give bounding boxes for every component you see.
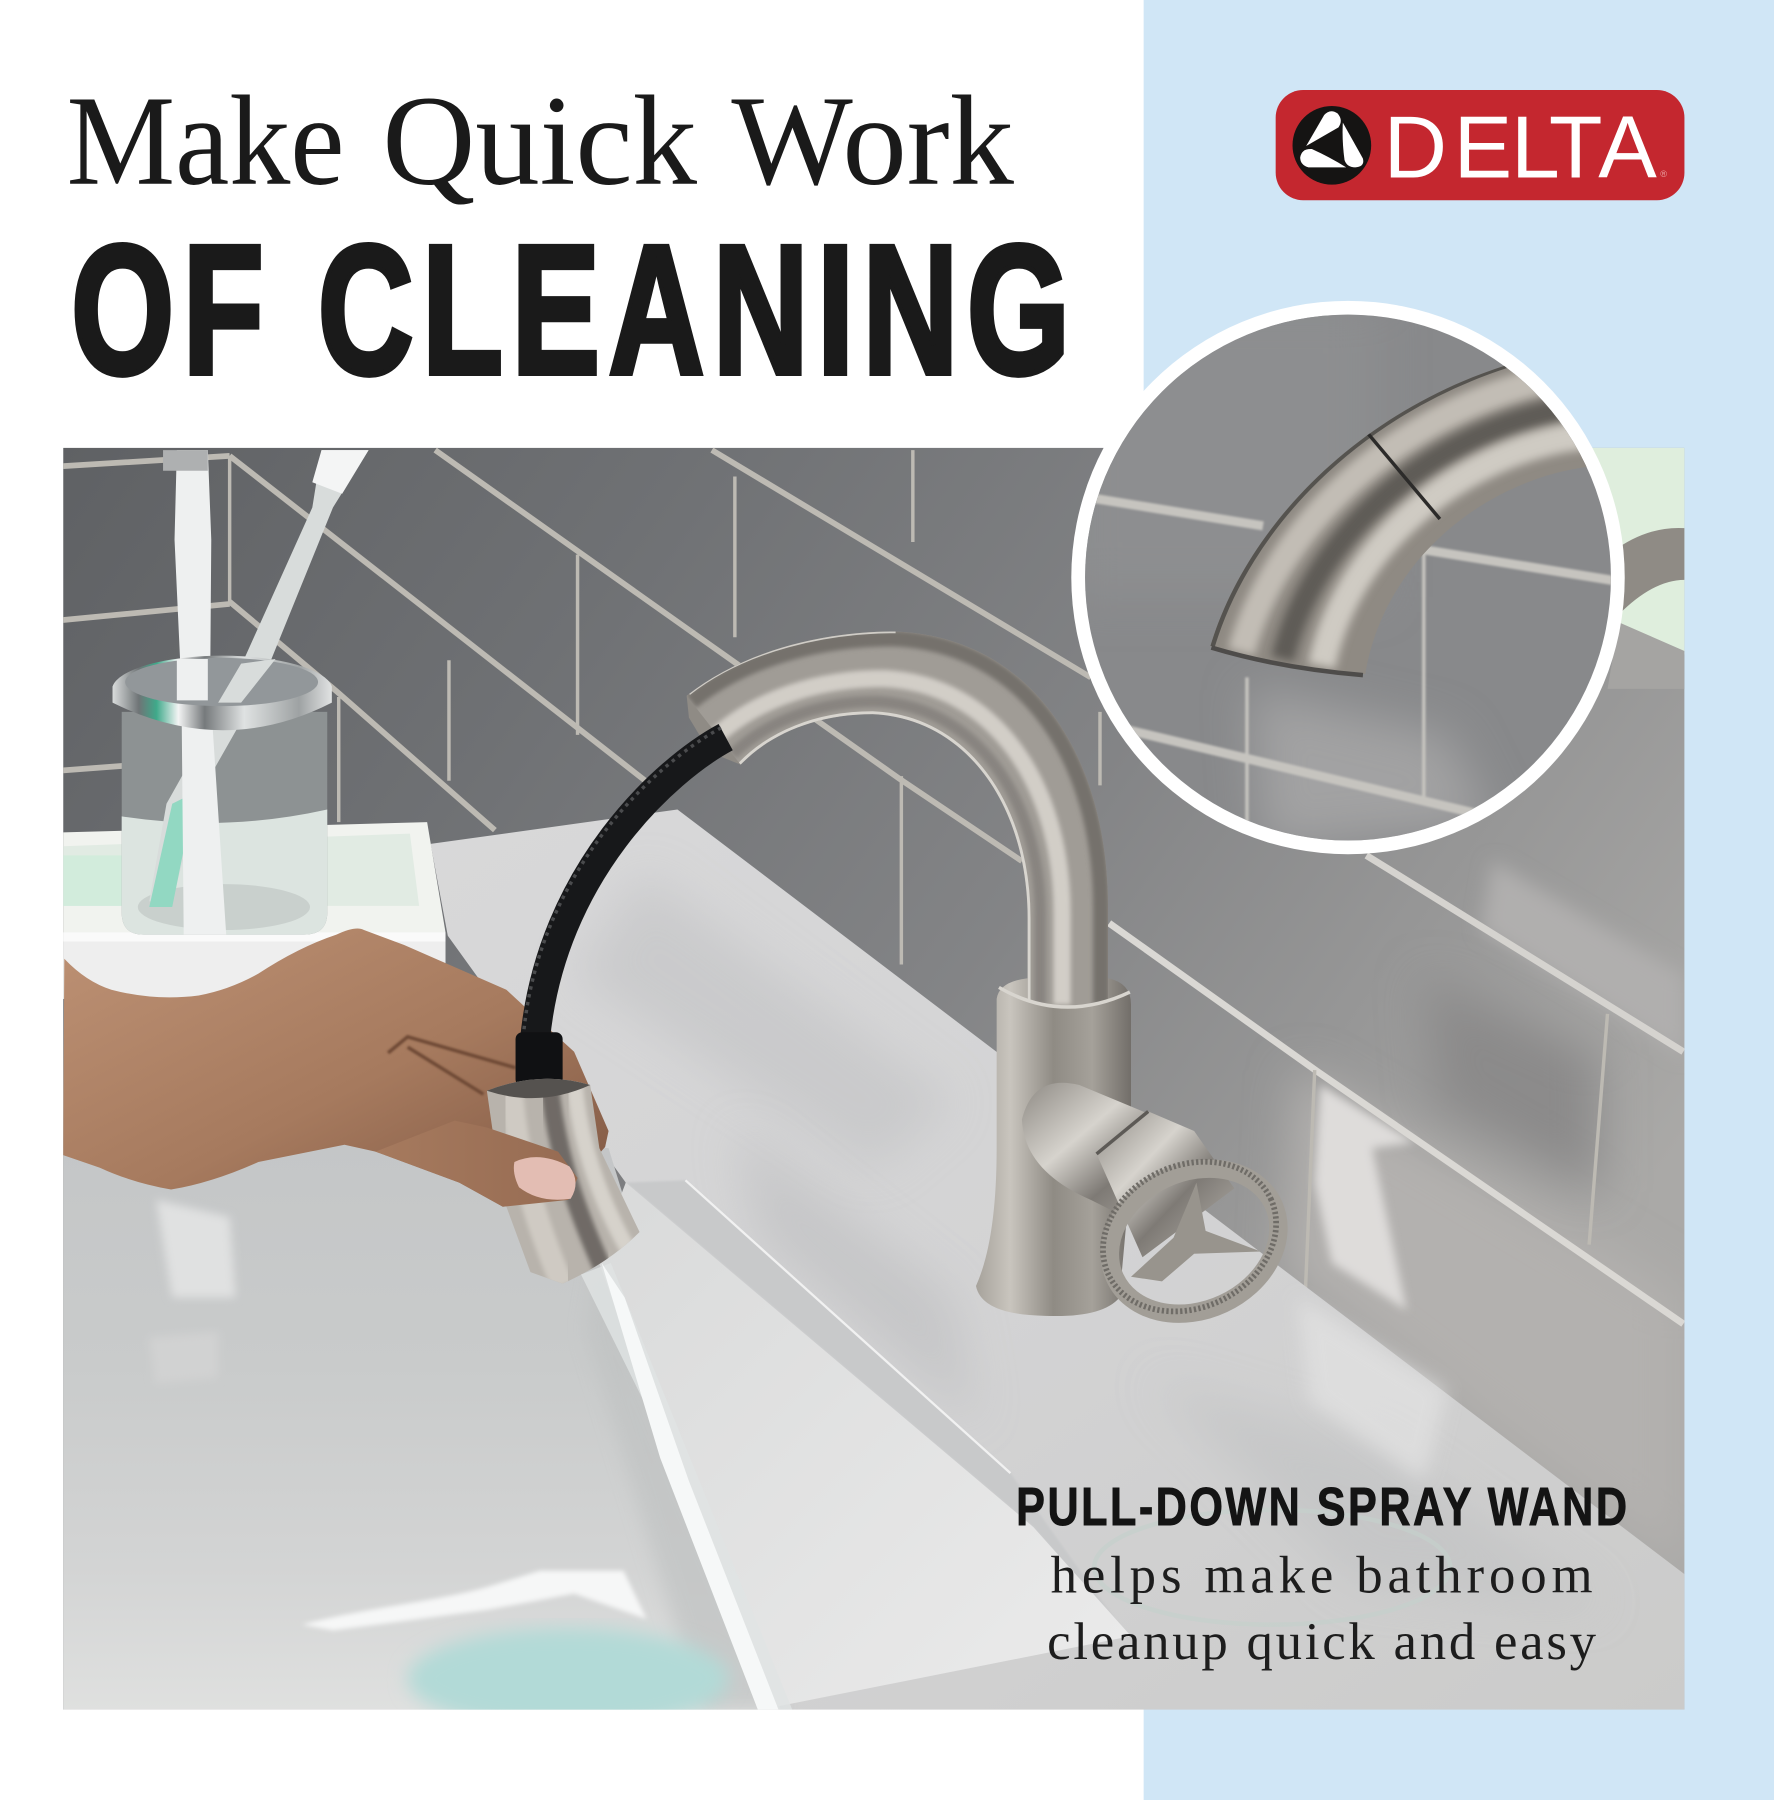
white sink side panel [597, 1183, 1131, 1710]
spray wand [482, 1068, 649, 1292]
sink basin [63, 1137, 1131, 1729]
caption heading: PULL-DOWN SPRAY WAND [1016, 1477, 1627, 1537]
caption line 1: helps make bathroom [1051, 1547, 1593, 1605]
wordmark: DELTA [1384, 97, 1657, 196]
mint tray corner and right faucet glimpse [1590, 448, 1684, 689]
title line 1 word: Quick: Quick [382, 69, 698, 212]
icon: delta triangle mark [1293, 106, 1371, 185]
photo: bathroom faucet scene [63, 448, 1684, 1729]
inset circle: spout close-up [1068, 299, 1653, 861]
marble lip [628, 1181, 1080, 1576]
spout of main faucet [686, 632, 1108, 1006]
cup rim [113, 656, 332, 730]
inset spout [1194, 321, 1653, 689]
faucet body [976, 978, 1131, 1316]
teal water [408, 1628, 729, 1729]
Delta logo [1276, 90, 1684, 200]
title line 1 word: Make: Make [67, 69, 344, 212]
wheel ring [1101, 1160, 1288, 1323]
caption [1016, 1477, 1627, 1671]
caption line 2: cleanup quick and easy [1047, 1613, 1597, 1671]
glass cup [122, 712, 327, 935]
title [67, 69, 1070, 412]
registered mark: ® [1660, 169, 1667, 179]
thumb [375, 1121, 578, 1207]
title line 2: OF CLEANING [71, 207, 1070, 412]
marble countertop [431, 809, 1684, 1710]
title line 1 word: Work: Work [731, 69, 1015, 212]
inset tile background [1068, 299, 1630, 861]
toothbrushes [149, 450, 369, 935]
black braided hose [516, 728, 726, 1086]
white tray with cup and toothbrushes [63, 450, 446, 999]
water stream [581, 1263, 792, 1710]
handle and wheel [1022, 1082, 1288, 1323]
faint glass on counter [1094, 1510, 1450, 1625]
hand behind wand [63, 928, 609, 1207]
tile wall [63, 448, 1684, 1710]
